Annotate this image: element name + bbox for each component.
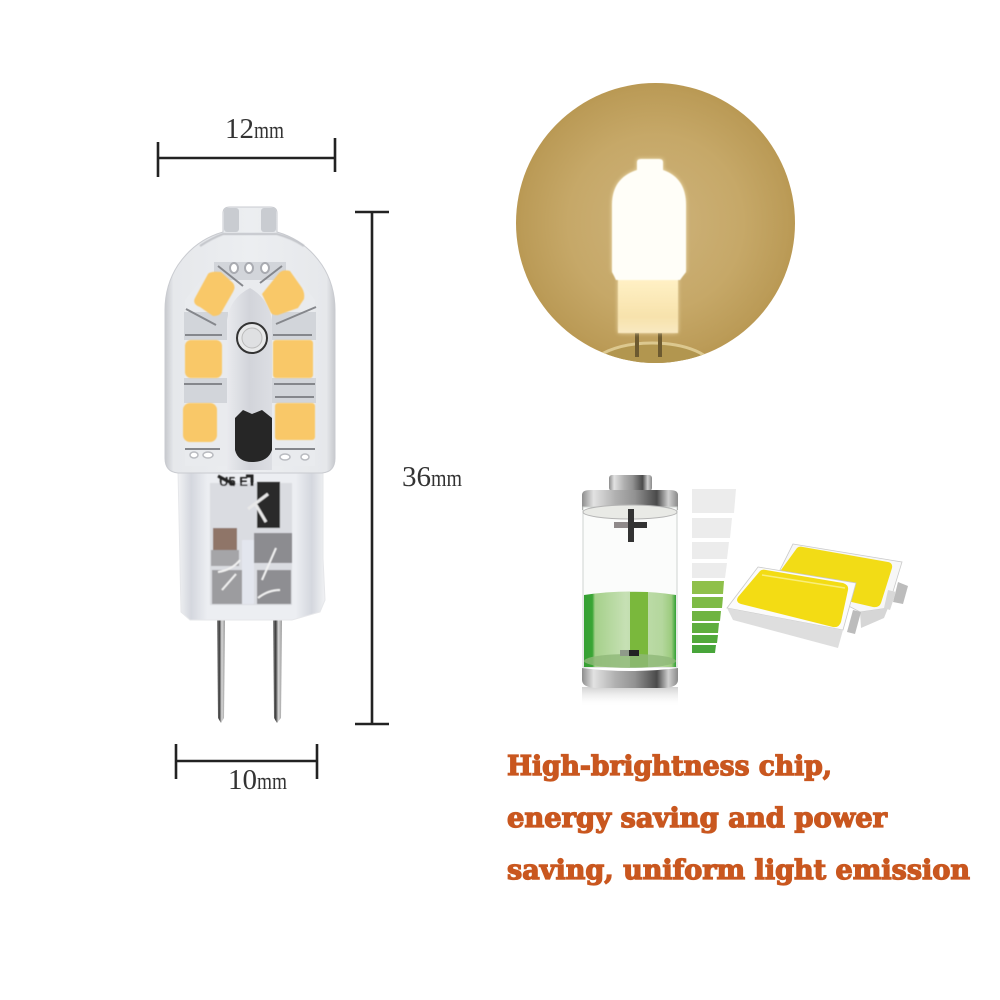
battery reflection bbox=[582, 687, 678, 707]
dimension: 36mm height: 36 bbox=[402, 461, 431, 493]
green charge level bbox=[584, 592, 676, 667]
glow halo bbox=[612, 159, 686, 333]
dimension: 12mm width bbox=[158, 113, 336, 177]
feature description text: High-brightness chip, bbox=[507, 751, 832, 782]
infographic canvas bbox=[156, 83, 970, 886]
battery top cap bbox=[609, 475, 652, 491]
LED chips bbox=[183, 270, 315, 442]
lit bulb photo in circle bbox=[516, 83, 795, 363]
solder holes bbox=[230, 263, 269, 273]
lower bulb casing bbox=[178, 470, 325, 620]
charge centre band bbox=[630, 592, 648, 667]
lower circuit bbox=[210, 474, 292, 605]
dimension: 12mm width: mm bbox=[254, 118, 284, 144]
board traces bbox=[184, 266, 316, 449]
board grey bands bbox=[184, 262, 316, 403]
minus sign bbox=[620, 650, 639, 656]
central rivet bbox=[237, 323, 267, 353]
LED chips illustration bbox=[727, 544, 908, 648]
front LED chip bbox=[727, 567, 861, 648]
battery icon bbox=[582, 475, 678, 707]
top nub details bbox=[200, 208, 304, 246]
bulb pins bbox=[635, 333, 662, 357]
lower glowing bulb bbox=[618, 280, 678, 334]
dimension: 10mm pin spacing bbox=[176, 744, 318, 796]
G4 LED bulb photo illustration bbox=[165, 207, 335, 723]
charge level bars bbox=[692, 489, 736, 653]
dimension: 36mm height bbox=[355, 212, 462, 724]
central strip bbox=[227, 288, 272, 470]
dimension: 10mm pin spacing: mm bbox=[257, 769, 287, 795]
upper glowing bulb bbox=[612, 159, 686, 280]
dimension: 10mm pin spacing: 10 bbox=[228, 764, 257, 796]
metal pins bbox=[217, 618, 282, 723]
empty bars bbox=[692, 489, 736, 578]
battery bottom cap bbox=[582, 668, 678, 688]
back LED chip bbox=[780, 544, 908, 628]
solder pads row bbox=[190, 452, 309, 460]
lower circuit: U5 E bbox=[219, 474, 248, 489]
inner circuit board bbox=[185, 262, 315, 466]
feature description text: energy saving and power bbox=[507, 803, 888, 834]
battery glass bbox=[583, 507, 677, 667]
battery collar bbox=[582, 490, 678, 510]
upper bulb casing bbox=[165, 207, 335, 473]
plus sign bbox=[614, 509, 647, 542]
reflective base under lit bulb bbox=[602, 342, 704, 363]
dimension: 36mm height: mm bbox=[431, 466, 462, 492]
feature description text: saving, uniform light emission bbox=[507, 855, 970, 886]
dimension: 12mm width: 12 bbox=[225, 113, 254, 145]
filled bars bbox=[692, 581, 724, 653]
feature description text bbox=[507, 751, 970, 886]
black driver chip bbox=[235, 410, 272, 462]
